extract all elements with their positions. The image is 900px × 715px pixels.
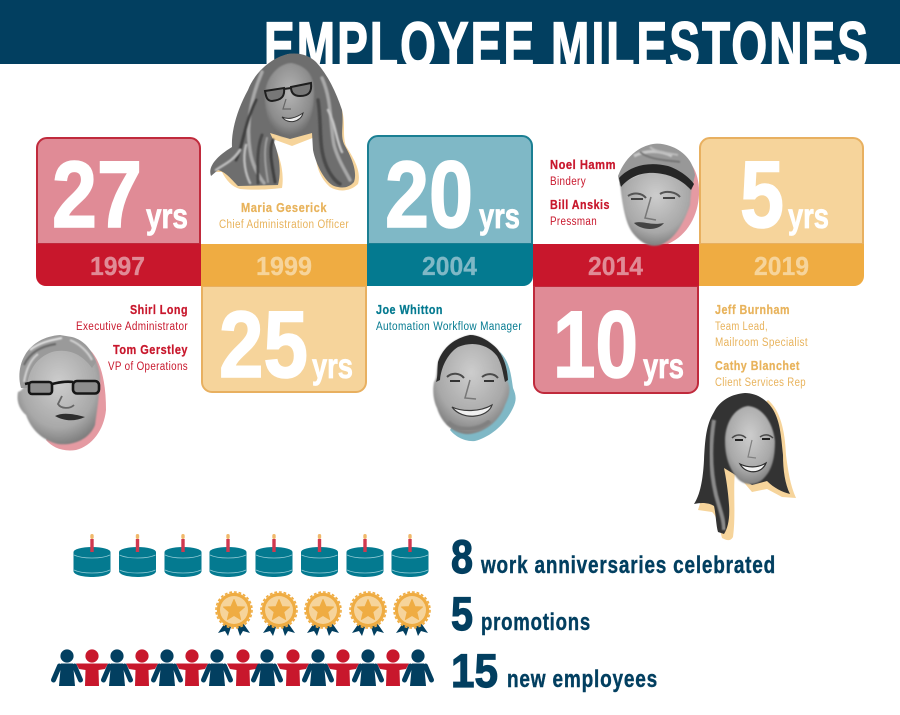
stat: work anniversaries: 8: [451, 530, 473, 583]
stat: new employees: 15: [451, 644, 498, 697]
label: Jeff Burnham and Cathy Blanchet: Client Services Rep: [715, 377, 806, 389]
label: Jeff Burnham and Cathy Blanchet: Cathy Blanchet: [715, 358, 800, 373]
label: Noel Hamm and Bill Anskis: Pressman: [550, 216, 597, 228]
panel: 2014: yrs: [643, 347, 684, 386]
panel: 2019: [699, 138, 864, 286]
label: Shirl Long and Tom Gerstley: Shirl Long: [130, 302, 188, 317]
stat: new employees: new employees: [507, 666, 658, 693]
panel: 2014: 10: [553, 292, 638, 398]
stat: work anniversaries: [451, 530, 776, 583]
label: Noel Hamm and Bill Anskis: Noel Hamm: [550, 157, 616, 172]
label: Jeff Burnham and Cathy Blanchet: Jeff Burnham: [715, 302, 790, 317]
label: Shirl Long and Tom Gerstley: Tom Gerstley: [113, 342, 188, 357]
label: Shirl Long and Tom Gerstley: VP of Operations: [108, 361, 188, 373]
stat: work anniversaries: work anniversaries celebrated: [480, 552, 776, 579]
panel: 1999: 25: [219, 292, 308, 398]
panel: 2004: [367, 136, 533, 286]
label: Maria Geserick: Maria Geserick: [241, 200, 327, 215]
panel: 1997: 27: [52, 142, 142, 248]
panel: 2014: 2014: [588, 253, 644, 281]
icon row: cakes: [74, 534, 428, 577]
label: Joe Whitton: Automation Workflow Manager: [376, 321, 522, 333]
panel: 2004: 2004: [422, 253, 478, 281]
portrait: Joe Whitton: [433, 335, 516, 441]
stat: promotions: 5: [451, 587, 473, 640]
label: Joe Whitton: [376, 302, 522, 333]
portrait: Noel Hamm: [618, 144, 699, 246]
panel: 2019: 5: [740, 142, 784, 248]
panel: 2019: 2019: [754, 253, 809, 281]
panel: 1999: [201, 244, 367, 398]
label: Joe Whitton: Joe Whitton: [376, 302, 443, 317]
icon row: medals: [216, 592, 430, 636]
portrait: Cathy Blanchet: [694, 393, 796, 540]
panel: 2014: [533, 244, 699, 398]
panel: 1999: 1999: [256, 253, 312, 281]
panel: 1997: [36, 138, 201, 286]
icon row: people: [54, 649, 432, 686]
label: Jeff Burnham and Cathy Blanchet: Mailroom Specialist: [715, 337, 808, 349]
label: Jeff Burnham and Cathy Blanchet: [715, 302, 808, 389]
header banner: [0, 0, 900, 64]
stat: promotions: [451, 587, 591, 640]
label: Noel Hamm and Bill Anskis: [550, 157, 616, 228]
portrait: Tom Gerstley: [17, 335, 106, 450]
label: Noel Hamm and Bill Anskis: Bill Anskis: [550, 197, 610, 212]
label: Maria Geserick: Chief Administration Officer: [219, 219, 349, 231]
panel: 1997: 1997: [90, 253, 145, 281]
panel: 2004: yrs: [479, 197, 520, 236]
label: Noel Hamm and Bill Anskis: Bindery: [550, 176, 586, 188]
label: Shirl Long and Tom Gerstley: Executive Administrator: [76, 321, 188, 333]
panel: 1997: yrs: [146, 197, 188, 236]
label: Shirl Long and Tom Gerstley: [76, 302, 188, 373]
panel: 2019: yrs: [788, 197, 829, 236]
label: Jeff Burnham and Cathy Blanchet: Team Lead,: [715, 321, 768, 333]
label: Maria Geserick: [219, 200, 349, 231]
panel: 1999: yrs: [312, 347, 353, 386]
stat: new employees: [451, 644, 658, 697]
panel: 2004: 20: [385, 142, 473, 248]
stat: promotions: promotions: [481, 609, 591, 636]
portrait: Maria Geserick: [210, 53, 359, 190]
